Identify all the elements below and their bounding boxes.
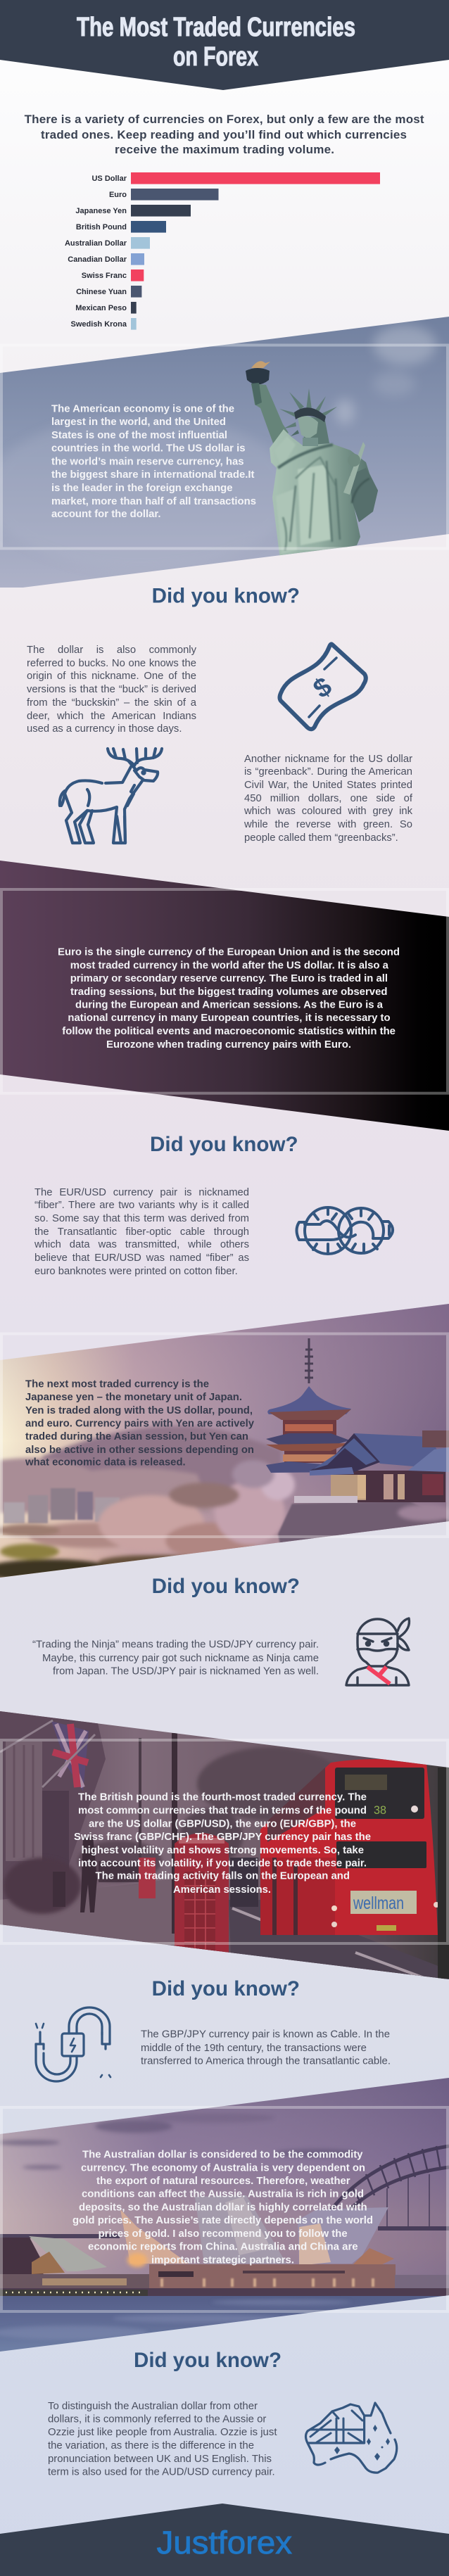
yen text: Yen is traded along with the US dollar, pound, <box>25 1404 253 1416</box>
temple <box>294 1430 449 1503</box>
text: cable nickname: The GBP/JPY currency pair is known as Cable. In the <box>141 2029 390 2041</box>
harbour bridge <box>0 2146 449 2236</box>
text: aussie nickname: To distinguish the Australian dollar from other <box>48 2401 258 2412</box>
text: buck nickname: referred to bucks. No one knows the <box>27 658 196 669</box>
title: on Forex <box>173 42 258 72</box>
text: greenback nickname: people called them “greenbacks”. <box>244 832 398 844</box>
US dollar text: The American economy is one of the <box>51 403 234 415</box>
pound text: are the US dollar (GBP/USD), the euro (EUR/GBP), the <box>89 1818 356 1830</box>
bar: Euro <box>109 189 218 201</box>
icon: deer <box>60 749 162 843</box>
US dollar text: countries in the world. The US dollar is <box>51 443 245 455</box>
trees <box>4 1747 345 1914</box>
text: greenback nickname: which was coloured with grey ink <box>244 806 412 817</box>
US dollar text: States is one of the most influential <box>51 429 227 441</box>
opera house <box>0 2195 449 2296</box>
cherry trees and foliage <box>0 1460 295 1582</box>
bar: Swedish Krona <box>71 318 137 330</box>
text: buck nickname: deer, which the American Indians <box>27 711 196 722</box>
text: trading the ninja: from Japan. The USD/JPY pair is nicknamed Yen as well. <box>53 1665 319 1677</box>
euro text <box>58 946 400 1051</box>
panel: pound photo <box>0 1710 449 1991</box>
logo: JustForex: Justforex <box>157 2525 293 2561</box>
text: aussie nickname: pronunciation between UK and US English. This <box>48 2454 272 2465</box>
bar: Mexican Peso <box>75 302 137 314</box>
bar: Chinese Yuan <box>76 286 141 298</box>
text: buck nickname: from the “buckskin” – the skin of a <box>27 697 196 709</box>
yen text: also be active in other sessions depending on <box>25 1444 254 1456</box>
bar: US Dollar <box>91 172 380 184</box>
US dollar text: market, more than half of all transactions <box>51 495 256 507</box>
australian dollar text: gold prices. The Aussie’s rate directly depends on the world <box>72 2214 373 2226</box>
panel frame <box>1 1740 448 1943</box>
bar: US Dollar: US Dollar <box>91 175 127 183</box>
text: cable nickname: transferred to America through the transatlantic cable. <box>141 2055 391 2067</box>
panel: US dollar photo <box>0 317 449 588</box>
euro text: primary or secondary reserve currency. The Euro is traded in all <box>70 972 388 984</box>
bar: Mexican Peso: Mexican Peso <box>75 304 127 312</box>
buildings <box>0 1711 106 1863</box>
bar: British Pound <box>76 221 166 233</box>
red bus <box>260 1759 439 1935</box>
australian dollar text: currency. The economy of Australia is very dependent on <box>81 2162 365 2174</box>
panel: euro <box>0 861 449 1131</box>
pavement <box>0 1879 175 1946</box>
pound text: The British pound is the fourth-most traded currency. The <box>78 1791 367 1803</box>
pagoda <box>266 1338 352 1473</box>
euro text: trading sessions, but the biggest trading volumes are observed <box>70 986 387 998</box>
text: buck nickname: used as a currency in those days. <box>27 723 182 735</box>
pound text: The main trading activity falls on the European and <box>96 1870 350 1882</box>
intro text: traded ones. Keep reading and you’ll find out which currencies <box>41 128 407 141</box>
euro text: national currency in many European countries, it is necessary to <box>68 1012 391 1024</box>
bar: Canadian Dollar <box>68 253 144 265</box>
pedestrians <box>53 1836 141 1912</box>
heading: did you know 2: Did you know? <box>150 1133 298 1156</box>
text: fiber nickname: so. Some say that this term was derived from <box>34 1213 249 1224</box>
bar: Japanese Yen <box>75 205 191 217</box>
bar: Chinese Yuan: Chinese Yuan <box>76 288 127 296</box>
intro text: receive the maximum trading volume. <box>115 143 334 156</box>
text: fiber nickname: the Transatlantic fiber-optic cable through <box>34 1226 249 1238</box>
footer banner <box>0 2504 449 2576</box>
title <box>77 13 355 72</box>
australian dollar text: deposits, so the Australian dollar is highly correlated with <box>79 2202 367 2214</box>
intro text: There is a variety of currencies on Forex, but only a few are the most <box>25 113 424 126</box>
text: fiber nickname: which data was transmitted, while others <box>34 1239 249 1250</box>
text: greenback nickname: Another nickname for the US dollar <box>244 753 412 764</box>
euro text: follow the political events and macroeconomic statistics within the <box>62 1025 396 1037</box>
australian dollar text: conditions can affect the Aussie. Australia is rich in gold <box>82 2188 364 2200</box>
US dollar text: is the leader in the foreign exchange <box>51 482 232 494</box>
icon: dollar bill <box>280 644 366 729</box>
text: fiber nickname: The EUR/USD currency pair is nicknamed <box>34 1186 249 1198</box>
US dollar text: largest in the world, and the United <box>51 416 226 428</box>
text: aussie nickname: the variation, as there is the difference in the <box>48 2440 254 2451</box>
bar chart: most traded currencies <box>65 172 380 330</box>
euro text: most traded currency in the world after the US dollar. It is also a <box>70 960 389 972</box>
text: greenback nickname: is “greenback”. During the American <box>244 766 412 778</box>
australian dollar text: important strategic partners. <box>151 2254 294 2266</box>
heading: did you know 4: Did you know? <box>152 1977 300 2000</box>
pound text <box>74 1791 371 1896</box>
text: cable nickname <box>141 2029 391 2067</box>
header banner <box>0 0 449 90</box>
pound text: highest volatility and shows strong movements. So, take <box>82 1844 364 1856</box>
US dollar text <box>51 403 256 520</box>
bar: Swiss Franc <box>82 269 144 281</box>
icon: ninja <box>346 1618 409 1685</box>
bar: Swiss Franc: Swiss Franc <box>82 272 127 280</box>
icon: australia map <box>305 2403 397 2473</box>
US dollar text: the world’s main reserve currency, has <box>51 456 244 468</box>
text: aussie nickname: term is also used for the AUD/USD currency pair. <box>48 2466 275 2477</box>
text: aussie nickname <box>48 2401 277 2477</box>
yen text: and euro. Currency pairs with Yen are actively <box>25 1417 255 1429</box>
text: buck nickname: The dollar is also commonly <box>27 645 196 656</box>
euro text: during the European and American sessions. As the Euro is a <box>75 999 384 1011</box>
heading: did you know 1: Did you know? <box>152 585 300 608</box>
heading: did you know 5: Did you know? <box>134 2349 282 2372</box>
telephone box <box>175 1833 229 1963</box>
text: buck nickname: origin of this nickname. One of the <box>27 671 196 682</box>
icon: dollar bill: $ <box>308 672 337 704</box>
australian dollar text: economic reports from China. Australia and China are <box>88 2241 358 2253</box>
text: greenback nickname: while the reverse with green. So <box>244 819 412 830</box>
text: fiber nickname: believe that EUR/USD was named “fiber” as <box>34 1252 249 1264</box>
icon: knot <box>297 1207 393 1254</box>
text: buck nickname <box>27 644 196 737</box>
bar: Swedish Krona: Swedish Krona <box>71 320 127 329</box>
statue of liberty <box>246 361 378 559</box>
text: fiber nickname: “fiber”. There are two variants why is it called <box>34 1200 249 1211</box>
panel: australian dollar photo <box>0 2078 449 2352</box>
pound text: into account its volatility, if you decide to trade these pair. <box>78 1858 367 1870</box>
panel frame <box>1 1334 448 1537</box>
text: trading the ninja: “Trading the Ninja” means trading the USD/JPY currency pair. <box>32 1639 319 1651</box>
city <box>4 1488 120 1523</box>
pound text: most common currencies that trade in terms of the pound <box>78 1805 367 1817</box>
icon: cable <box>36 2007 110 2081</box>
bar: British Pound: British Pound <box>76 223 127 231</box>
australian dollar text: the export of natural resources. Therefore, weather <box>96 2175 350 2187</box>
intro text <box>25 113 424 156</box>
pound text: American sessions. <box>173 1884 271 1896</box>
title: The Most Traded Currencies <box>77 13 355 42</box>
bar: Australian Dollar: Australian Dollar <box>65 239 127 248</box>
red bus: 38 <box>374 1803 386 1817</box>
text: fiber nickname: euro banknotes were printed on cotton fiber. <box>34 1266 238 1277</box>
street lamp and pole <box>139 1733 177 1934</box>
text: buck nickname: versions is that the “buck” is derived <box>27 684 196 695</box>
text: greenback nickname: Civil War, the United States printed <box>244 780 412 791</box>
water <box>0 2299 352 2340</box>
bar: Canadian Dollar: Canadian Dollar <box>68 255 127 264</box>
yen text: Japanese yen – the monetary unit of Japan. <box>25 1391 242 1403</box>
panel frame <box>1 889 448 1093</box>
US dollar text: account for the dollar. <box>51 508 160 520</box>
panel: yen photo <box>0 1304 449 1582</box>
text: trading the ninja <box>32 1639 319 1677</box>
pound text: Swiss franc (GBP/CHF). The GBP/JPY currency pair has the <box>74 1831 371 1843</box>
red bus: wellman <box>353 1893 404 1913</box>
bar: Australian Dollar <box>65 237 150 249</box>
panel frame <box>1 345 448 549</box>
panel frame <box>1 2107 448 2311</box>
heading: did you know 3: Did you know? <box>152 1575 300 1598</box>
euro text: Eurozone when trading currency pairs with Euro. <box>106 1039 351 1051</box>
clouds <box>0 2113 359 2169</box>
australian dollar text: The Australian dollar is considered to be the commodity <box>82 2149 363 2161</box>
text: greenback nickname: 450 million dollars, one side of <box>244 793 412 804</box>
text: greenback nickname <box>244 753 412 846</box>
stone wall <box>277 1502 449 1542</box>
text: aussie nickname: dollars, it is commonly referred to the Aussie or <box>48 2414 266 2425</box>
text: aussie nickname: Ozzie just like people from Australia. Ozzie is just <box>48 2427 277 2438</box>
US dollar text: the biggest share in international trade.It <box>51 469 255 481</box>
text: cable nickname: middle of the 19th century, the transactions were <box>141 2043 367 2054</box>
yen text: traded during the Asian session, but Yen can <box>25 1430 248 1442</box>
bar: Japanese Yen: Japanese Yen <box>75 207 127 215</box>
australian dollar text: prices of gold. I also recommend you to follow the <box>99 2228 348 2240</box>
euro text: Euro is the single currency of the European Union and is the second <box>58 946 400 958</box>
text: fiber nickname <box>34 1186 249 1279</box>
union flag <box>0 1720 95 1791</box>
yen text: The next most traded currency is the <box>25 1378 209 1390</box>
bar: Euro: Euro <box>109 191 127 199</box>
australian dollar text <box>72 2149 373 2266</box>
text: trading the ninja: Maybe, this currency pair got such nickname as Ninja came <box>42 1653 319 1664</box>
yen text <box>25 1378 255 1468</box>
yen text: what economic data is released. <box>25 1457 186 1468</box>
